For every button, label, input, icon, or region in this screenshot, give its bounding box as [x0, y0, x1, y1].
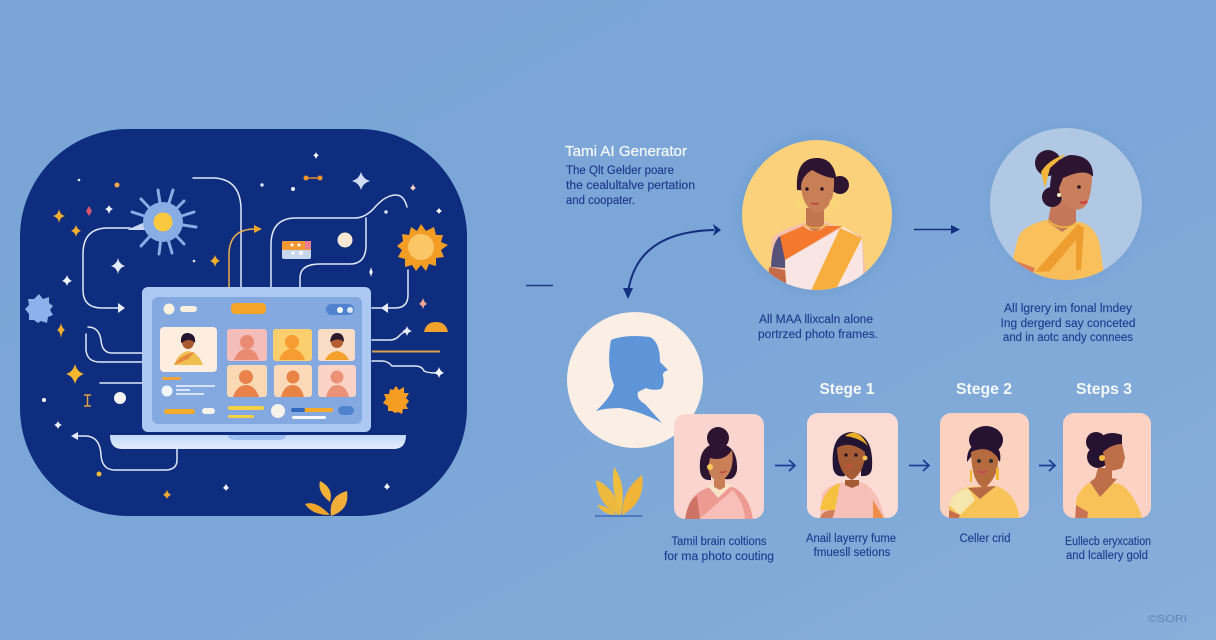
tile: peach silhouette two [274, 365, 312, 397]
step tile: source [674, 414, 764, 520]
caption: steps three: and lcallery gold [1066, 550, 1148, 562]
tile: small portrait [318, 329, 355, 361]
icon: blue sun [128, 190, 196, 254]
text block: generator description: the cealultalve pertation [566, 180, 695, 192]
text block: generator description: The Qlt Gelder poare [566, 165, 674, 177]
caption: steps three: Eullecb eryxcation [1065, 536, 1151, 548]
caption: stage one: Anail layerry fume [806, 533, 896, 545]
caption: first portrait: portrzed photo frames. [758, 329, 878, 341]
step tile: stage 2 [940, 413, 1029, 520]
heading: generator title: Tami AI Generator [565, 143, 687, 160]
caption: source tile: Tamil brain coltions [672, 536, 767, 548]
icon: sparkles [42, 152, 444, 499]
icon: small ui card [282, 241, 311, 259]
portrait: yellow circle woman [742, 140, 892, 290]
arrow: step two [909, 460, 929, 471]
tile: pink silhouette [227, 329, 267, 361]
text block: generator description: and coopater. [566, 195, 635, 207]
icon: leaves [305, 481, 347, 516]
connector lines [71, 176, 440, 470]
label: stage one: Stege 1 [820, 381, 875, 398]
icon: orange sun [397, 224, 448, 271]
caption: first portrait: All MAA llixcaln alone [759, 314, 873, 326]
decorative dash [526, 284, 553, 286]
caption: second portrait: and in aotc andy connees [1003, 332, 1133, 344]
caption: second portrait: Ing dergerd say conceted [1000, 318, 1136, 330]
text block: generator description [566, 165, 695, 207]
tile: portrait [160, 327, 217, 372]
watermark: ©SORI [1148, 613, 1187, 625]
caption: stage one: fmuesll setions [814, 547, 891, 559]
step tile: stage 1 [807, 413, 898, 520]
icon: orange dome [424, 322, 448, 332]
arrow: to second portrait [914, 225, 960, 234]
tile: yellow silhouette [273, 329, 312, 361]
icon: laptop [110, 287, 406, 449]
arrow: curved flow [623, 224, 721, 299]
caption: second portrait [1000, 303, 1136, 344]
caption: stage one [806, 533, 896, 559]
label: steps three: Steps 3 [1076, 381, 1132, 398]
icon: orange gear [383, 386, 409, 414]
tile: rose silhouette [318, 365, 356, 397]
label: stage two: Stege 2 [956, 381, 1012, 398]
arrow: step three [1039, 460, 1055, 471]
caption: steps three [1065, 536, 1151, 562]
icon: blue gear star [25, 294, 53, 323]
panel: dark network illustration [20, 129, 467, 516]
icon: silhouette circle [567, 312, 703, 448]
arrow: step one [775, 460, 795, 471]
icon: yellow plant [595, 467, 643, 516]
caption: source tile [664, 536, 774, 563]
caption: stage two: Celler crid [960, 533, 1010, 545]
step tile: steps 3 [1063, 413, 1151, 520]
tile: peach silhouette [227, 365, 267, 397]
caption: first portrait [758, 314, 878, 341]
caption: second portrait: All lgrery im fonal lmdey [1004, 303, 1132, 315]
portrait: blue circle woman [990, 128, 1142, 280]
caption: source tile: for ma photo couting [664, 551, 774, 563]
icon: cream moon [338, 232, 352, 248]
